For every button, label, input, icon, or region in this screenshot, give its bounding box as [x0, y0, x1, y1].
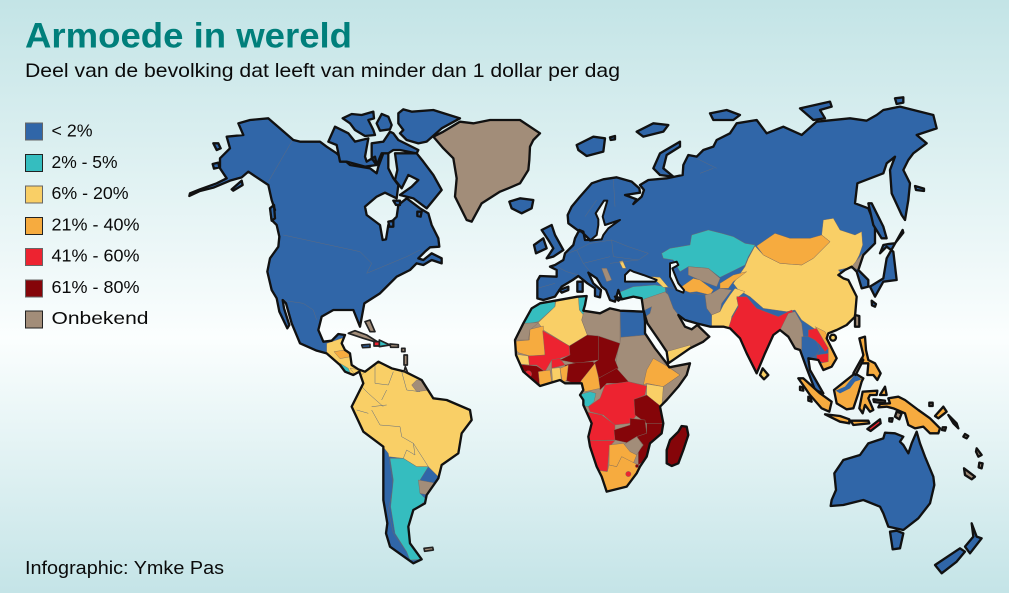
Nigeria — [565, 362, 595, 387]
Kyrgyzstan and Tajikistan — [720, 272, 747, 288]
New Guinea — [878, 397, 940, 433]
legend item: Onbekend: Onbekend — [52, 308, 148, 328]
South Africa — [595, 457, 640, 497]
Algeria — [538, 297, 587, 346]
Georgia and Armenia — [652, 277, 668, 287]
Australia — [831, 432, 934, 530]
Greenland — [433, 120, 540, 222]
Moldova — [619, 261, 626, 268]
Kenya — [647, 384, 663, 408]
Ghana — [552, 368, 562, 384]
Madagascar — [667, 426, 688, 466]
Western Sahara — [516, 322, 538, 340]
Tunisia — [578, 297, 586, 315]
Ivory Coast — [538, 370, 552, 388]
Philippines — [858, 337, 881, 380]
legend item: 2% - 5%: 2% - 5% — [52, 152, 118, 172]
Java — [825, 414, 849, 423]
Zambia — [614, 418, 647, 443]
Yemen — [668, 344, 691, 361]
Egypt — [620, 312, 645, 338]
legend item: 6% - 20%: 6% - 20% — [52, 183, 128, 203]
Swaziland — [635, 464, 639, 468]
legend item: 61% - 80%: 61% - 80% — [52, 277, 140, 297]
Middle East — [643, 292, 708, 352]
Sri Lanka — [760, 368, 768, 379]
Northern Borneo — [836, 374, 862, 393]
legend item: 21% - 40%: 21% - 40% — [52, 214, 140, 234]
Balkan — [602, 268, 612, 282]
European islands — [509, 97, 903, 301]
Burkina Faso — [552, 358, 565, 368]
Sierra Leone — [525, 371, 532, 377]
Mauritania — [516, 326, 545, 356]
map: Australia and Pacific islands — [760, 335, 983, 573]
Botswana — [609, 443, 637, 467]
Moluccas — [880, 387, 887, 395]
Pacific islands — [963, 434, 983, 479]
Mali — [528, 331, 570, 372]
Caribbean islands — [348, 320, 433, 551]
New Zealand — [935, 523, 982, 573]
Borneo — [834, 373, 863, 409]
Baltic Sea — [590, 201, 620, 241]
credit: Infographic: Ymke Pas — [25, 558, 224, 578]
Somalia — [664, 368, 680, 386]
small islands — [800, 387, 958, 431]
Timor — [867, 419, 881, 431]
Kazakhstan — [662, 230, 755, 277]
map: the Americas — [189, 109, 540, 565]
Palawan — [853, 358, 863, 375]
map: Europe and Asia — [509, 97, 937, 395]
Vietnam — [814, 326, 836, 368]
Guinea — [515, 364, 545, 388]
world map — [189, 97, 983, 573]
Black Sea — [625, 270, 657, 282]
map: Africa — [510, 296, 693, 497]
Libya — [582, 312, 620, 344]
Myanmar — [779, 312, 803, 353]
Laos — [808, 328, 828, 352]
Hainan — [830, 335, 836, 341]
Caspian Sea — [670, 262, 684, 293]
title: Armoede in wereld — [25, 16, 352, 56]
subtitle: Deel van de bevolking dat leeft van minder dan 1 dollar per dag — [25, 60, 620, 82]
Chad — [593, 336, 620, 378]
map: Indonesia, the Philippines and New Guinea — [798, 337, 958, 433]
Central African Republic — [598, 368, 630, 390]
Zimbabwe — [623, 437, 643, 455]
Niger — [560, 335, 598, 363]
Iran — [665, 287, 712, 328]
inland seas — [590, 201, 684, 293]
legend — [26, 120, 148, 328]
Mongolia — [757, 233, 830, 265]
Cambodia — [817, 353, 828, 365]
Gabon — [578, 392, 596, 407]
New Britain — [935, 407, 947, 418]
Cameroon — [578, 363, 600, 392]
Seram — [873, 399, 885, 403]
DR Congo and Uganda — [588, 382, 647, 425]
Arctic islands of Canada and coastal islands of Alaska — [213, 109, 460, 227]
Morocco — [524, 302, 556, 324]
Sumatra — [798, 378, 832, 412]
India — [728, 297, 795, 375]
Sulawesi — [859, 391, 877, 413]
Ethiopia — [643, 358, 680, 387]
Mozambique — [637, 423, 667, 465]
legend item: < 2% — [26, 120, 92, 140]
Namibia — [585, 441, 615, 472]
Lesser Sunda Islands — [851, 421, 869, 425]
Tasmania — [890, 531, 903, 549]
Jordan — [644, 306, 652, 316]
Lesotho — [626, 471, 631, 477]
China — [733, 218, 863, 338]
Turkmenistan — [682, 278, 713, 295]
Sudan — [615, 335, 667, 385]
Pakistan — [712, 288, 745, 327]
legend item: Onbekend — [26, 308, 148, 328]
Senegal — [517, 354, 529, 365]
Angola — [585, 412, 615, 441]
Afghanistan — [705, 288, 732, 315]
North Korea — [852, 253, 863, 270]
Sakhalin, Kamchatka islands, Japan and Taiwan — [855, 186, 924, 327]
Togo and Benin — [560, 365, 568, 383]
Turkey — [620, 284, 666, 300]
Thailand and Malaysia — [802, 336, 820, 372]
Uzbekistan — [688, 267, 720, 287]
Tanzania — [634, 395, 667, 423]
legend item: 41% - 60%: 41% - 60% — [52, 246, 140, 266]
legend item: < 2%: < 2% — [52, 120, 92, 140]
